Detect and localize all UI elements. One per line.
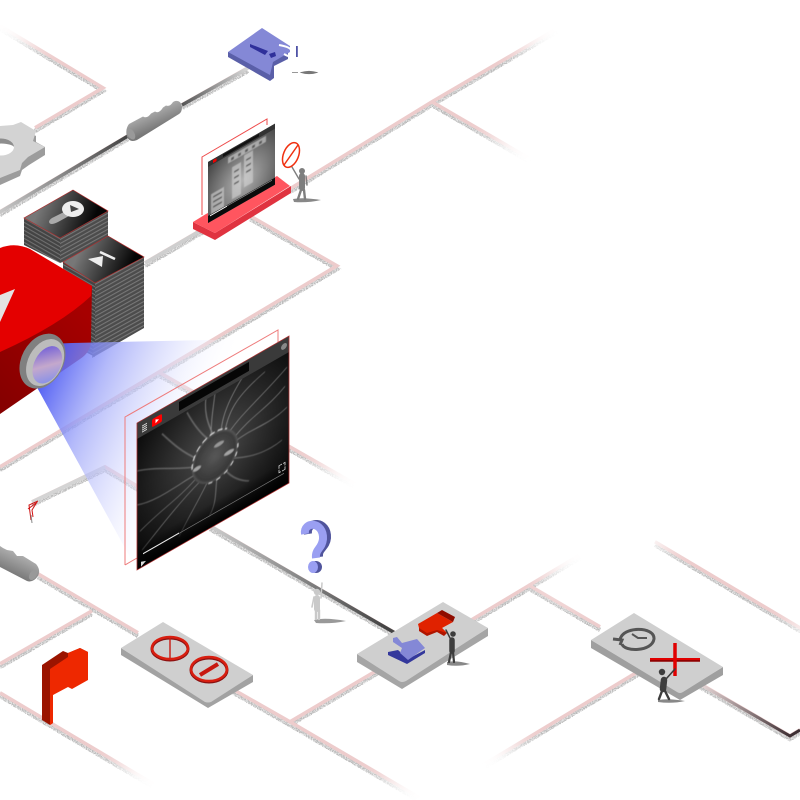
icon: red flag (42, 648, 88, 725)
panel: plate with history and cross icons (591, 613, 723, 703)
projector lens (10, 326, 75, 397)
icon: inline cylinder connector (125, 101, 182, 141)
stack: skip button (63, 236, 144, 358)
neuron image (137, 345, 287, 561)
icon: thumbs up blue (388, 637, 425, 664)
icon: inline cylinder connector lower (0, 546, 39, 582)
panel: plate with prohibition icons (121, 622, 253, 708)
white ring arcs (279, 45, 292, 57)
icon: frayed red wire end (28, 501, 38, 523)
stack: play button (24, 190, 108, 263)
panel: plate with thumbs icons (357, 602, 488, 689)
play icon (141, 559, 146, 567)
person at cross (658, 669, 685, 703)
person with prohibition sign (279, 140, 321, 202)
icon: question mark with person (305, 524, 346, 623)
pedestal base (193, 176, 291, 240)
icon: history clock (613, 629, 654, 649)
panel: red pedestal with blocked video (193, 119, 321, 240)
person fading (312, 583, 346, 623)
progress bar (143, 473, 284, 554)
prohibition sign (279, 140, 303, 170)
icon: thumbs down red (418, 610, 455, 636)
panel: stacked media buttons (24, 190, 144, 358)
video screen (137, 336, 289, 570)
projector side (0, 286, 92, 414)
menu icon (142, 423, 147, 432)
back frame (202, 119, 267, 215)
youtube badge (152, 414, 162, 427)
fullscreen icon (279, 462, 285, 473)
bubble shadow (292, 71, 317, 74)
back frame (125, 330, 278, 565)
icon: red cross (650, 643, 700, 676)
small video screen (208, 124, 275, 223)
panel: red projector body (0, 245, 92, 414)
person at thumbs (446, 630, 470, 666)
icon: gear (0, 122, 45, 185)
light beam (33, 340, 290, 570)
icon: play triangle (0, 289, 15, 322)
projector top (0, 245, 92, 352)
panel: main video player (125, 330, 289, 570)
blue sliver (296, 46, 298, 57)
icon: no entry diagonal (191, 657, 227, 682)
player top bar (137, 336, 289, 439)
icon: no entry vertical (152, 637, 188, 660)
icon: speech bubble (228, 28, 317, 81)
